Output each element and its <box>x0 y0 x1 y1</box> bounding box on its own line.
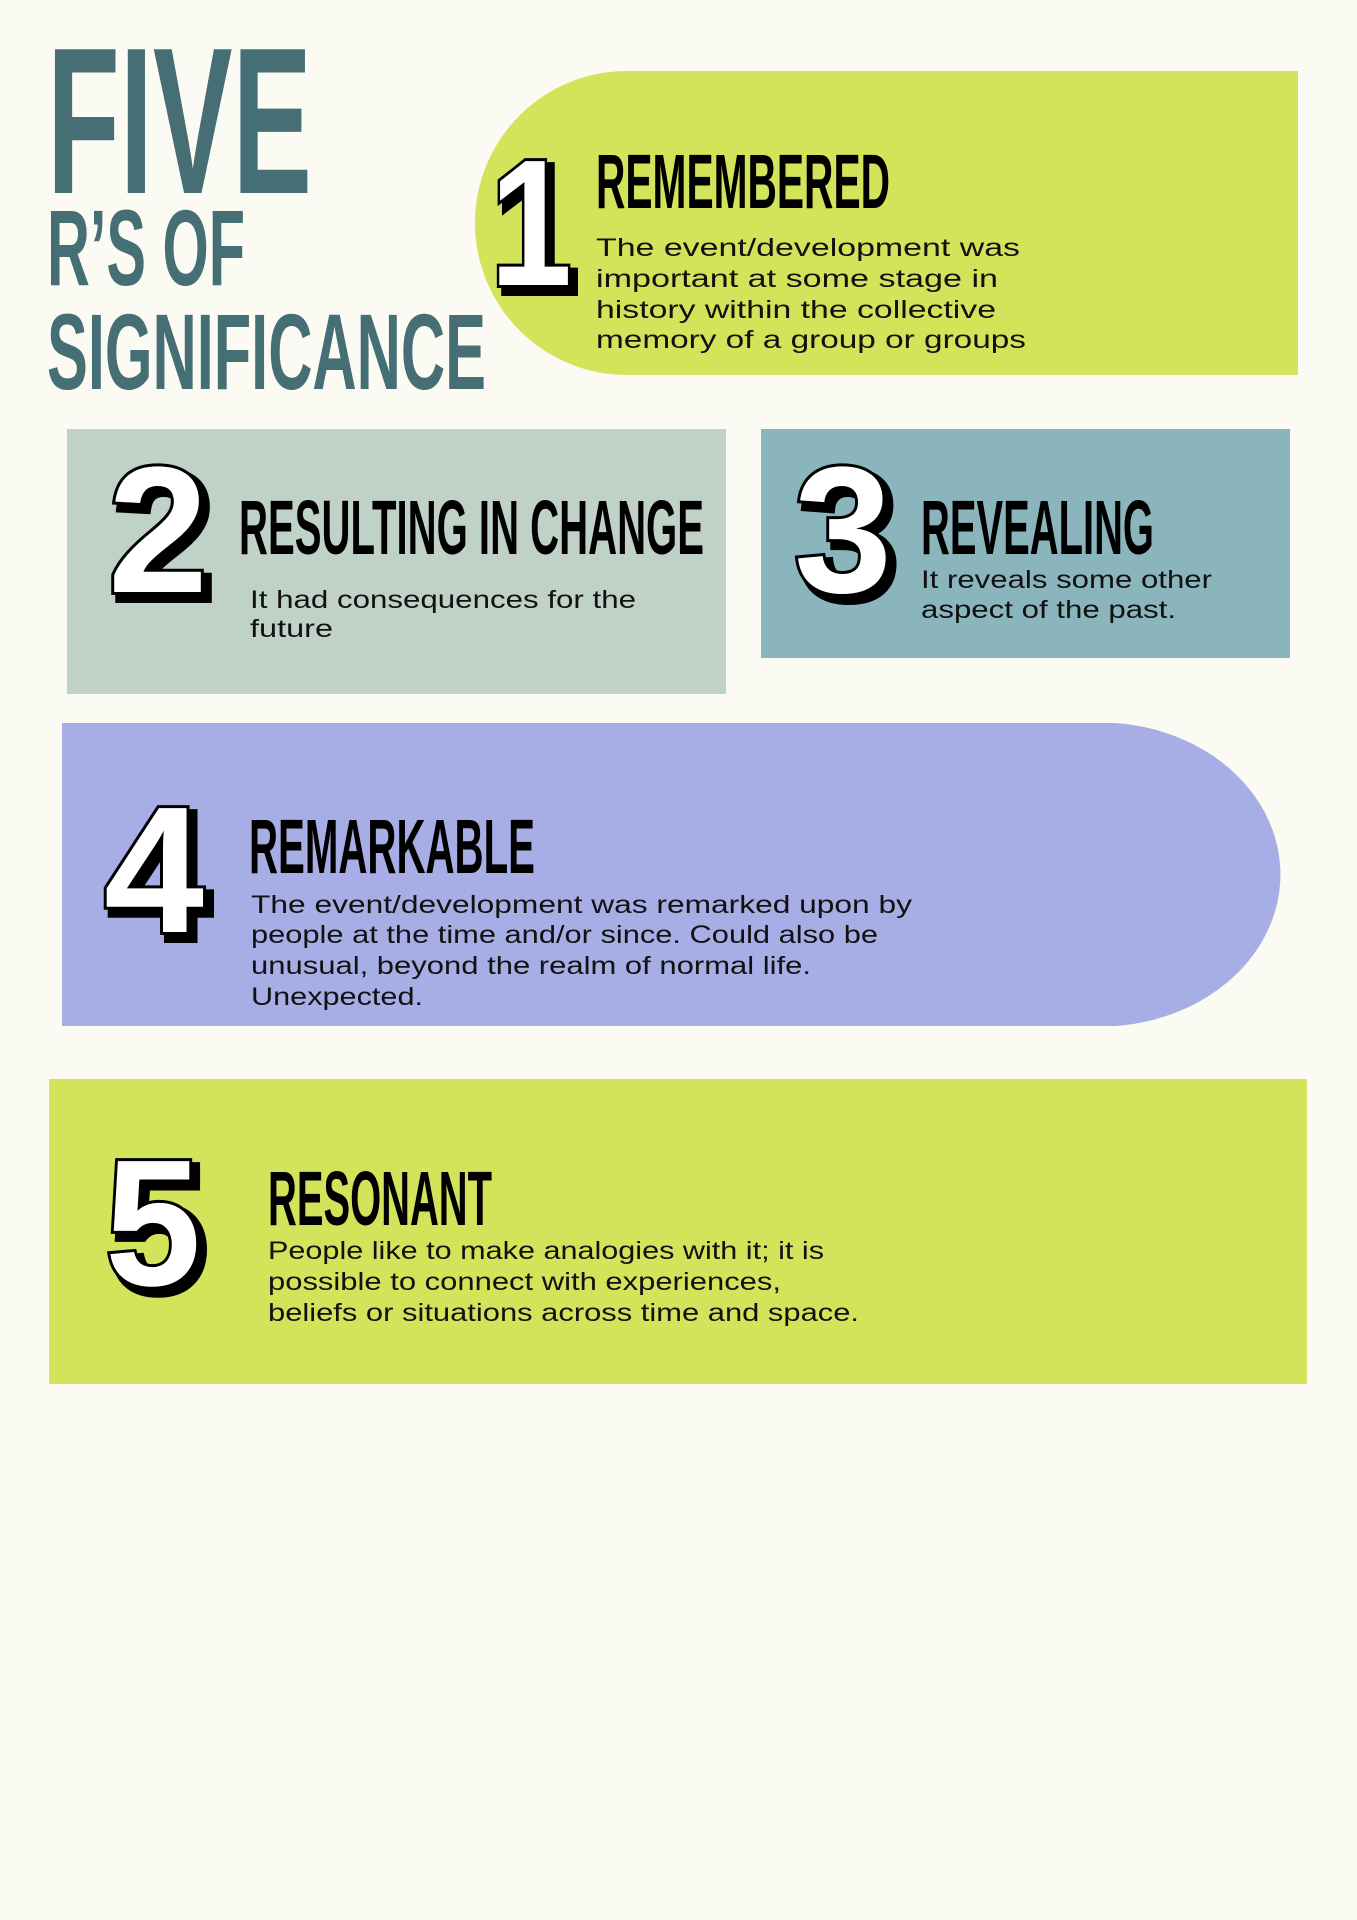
icon: number 1: 1 <box>496 129 578 330</box>
panel: remarkable <box>62 723 1280 1026</box>
icon: number 5: 5 <box>105 1123 201 1324</box>
text: remarkable body: people at the time and/or since. Could also be <box>251 921 878 949</box>
heading: remembered: REMEMBERED <box>596 139 890 225</box>
heading: resulting in change: RESULTING IN CHANGE <box>239 485 704 571</box>
heading: remarkable: REMARKABLE <box>249 804 535 890</box>
text: remarkable body: The event/development was remarked upon by <box>251 891 913 919</box>
text: remembered body: memory of a group or groups <box>596 326 1026 354</box>
icon: number 4: 4 <box>104 770 204 971</box>
icon: number 2: 2 <box>108 430 208 631</box>
panel: remembered <box>475 71 1298 375</box>
text: remarkable body: unusual, beyond the realm of normal life. <box>251 952 811 980</box>
text: change body: future <box>250 615 333 643</box>
icon: number 1: 1 <box>490 123 572 324</box>
title: SIGNIFICANCE <box>47 291 486 412</box>
title <box>47 5 486 412</box>
text: resonant body: beliefs or situations across time and space. <box>268 1299 859 1327</box>
icon: number 3: 3 <box>800 436 898 637</box>
text: change body <box>250 586 636 643</box>
text: revealing body: aspect of the past. <box>921 596 1176 624</box>
text: resonant body: People like to make analogies with it; it is <box>268 1237 824 1265</box>
text: change body: It had consequences for the <box>250 586 636 614</box>
text: remembered body: important at some stage in <box>596 265 998 293</box>
panel: revealing <box>761 429 1290 658</box>
panel: resulting in change <box>67 429 726 694</box>
panel: resonant <box>49 1079 1307 1384</box>
text: remembered body: The event/development was <box>596 234 1020 262</box>
heading: resonant: RESONANT <box>268 1156 492 1242</box>
title: FIVE <box>47 5 312 238</box>
text: remembered body <box>596 234 1026 354</box>
icon: number 3: 3 <box>794 430 892 631</box>
text: remembered body: history within the collective <box>596 296 996 324</box>
title: R’S OF <box>47 187 245 308</box>
text: revealing body: It reveals some other <box>921 566 1212 594</box>
text: remarkable body <box>251 891 913 1011</box>
text: resonant body: possible to connect with experiences, <box>268 1268 781 1296</box>
icon: number 2: 2 <box>114 436 214 637</box>
text: remarkable body: Unexpected. <box>251 983 423 1011</box>
text: resonant body <box>268 1237 859 1327</box>
icon: number 4: 4 <box>110 776 210 977</box>
text: revealing body <box>921 566 1212 624</box>
icon: number 5: 5 <box>111 1129 207 1330</box>
heading: revealing: REVEALING <box>921 485 1154 571</box>
